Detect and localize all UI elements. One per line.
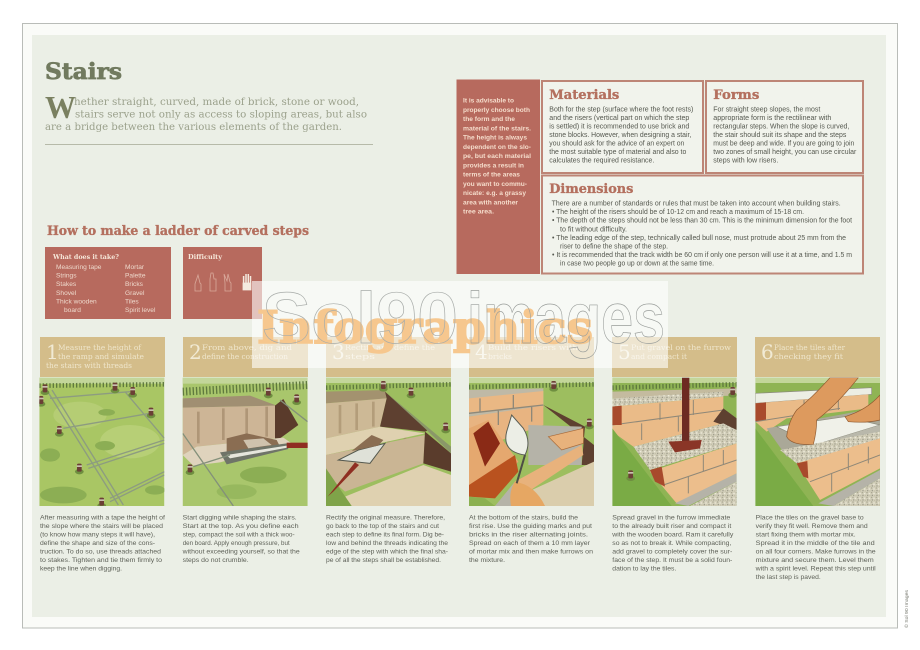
panel: side note: nicate: e.g. a grassy [463,190,526,197]
step 4 text: the mixture. [469,557,505,564]
step 4 header: 4 [475,340,488,364]
panel: difficulty [183,247,262,319]
step 2 header [183,337,308,377]
panel: materials: calculates the required resistance. [549,158,654,164]
icon: difficulty hands [195,273,251,291]
panel: side note: material of the stairs. [463,125,531,132]
step 5 [611,337,737,572]
panel: side note: dependent on the slo- [463,144,531,151]
step 5 header: 5 [618,340,631,364]
step 2 text: den board. Apply enough pressure, but [183,540,290,547]
panel: dimensions: • The leading edge of the step, technically called bull nose, must protrude about 25 mm from the [552,235,846,242]
step 4 header: Build the risers with [488,343,578,352]
step 5 text [611,514,734,572]
step 2 header: From above, dig and [202,343,292,352]
panel: forms: For straight steep slopes, the most [713,106,820,114]
panel: side note [456,80,540,274]
step 3 text: Rectify the original measure. Therefore, [326,514,445,522]
step 6 illustration: placing tiles [755,378,880,506]
step 2 text: Start digging while shaping the stairs. [183,514,297,522]
step 6 text: the last step is paved. [756,574,821,581]
panel: side note: properly choose both [463,107,530,114]
panel: what does it take: Thick wooden [56,298,97,305]
panel: what does it take: Spirit level [125,307,156,314]
panel: side note: pe, but each material [463,153,531,160]
step 3 text: pe of all the steps shall be established. [326,557,441,564]
panel: materials [542,81,703,173]
step 1 header [40,337,165,377]
panel: materials: stone blocks. However, when designing a stair, [549,132,691,139]
step 5 text: to the already built riser and compact it [612,523,731,530]
step 6 text: Place the tiles on the gravel base to [756,514,864,522]
panel: side note: you want to commu- [463,181,527,188]
step 2 header: define the construction [202,352,288,361]
step 4 text: bricks in the riser alternating joints. [469,532,588,538]
step 2 text: steps do not crumble. [183,557,249,564]
heading: how to make: How to make a ladder of carved steps [47,224,309,239]
step 5 text: Spread gravel in the furrow immediate [612,514,731,522]
step 5 text: face of the step. It must be a solid foun- [612,557,732,564]
step 1 text: After measuring with a tape the height of [40,514,165,522]
step 3 illustration: trowel on carved steps [326,378,451,506]
step 3 header [326,337,451,377]
panel: what does it take: board [64,307,81,314]
step 6 text: with a spirit level. Repeat this step until [755,566,876,572]
panel: what does it take: Gravel [125,290,145,297]
panel: materials: Materials [549,88,619,103]
step 4 text: Spread on each of them a 10 mm layer [469,540,591,547]
panel: what does it take: Mortar [125,264,145,271]
panel: materials: and the risers (vertical part on which the step [549,115,689,122]
step 3 text: edge of the step with which the final sha- [326,548,448,556]
step 2 text [182,514,300,564]
panel: what does it take: Stakes [56,281,77,288]
step 5 illustration: ramming gravel [612,378,737,506]
step 1 text: keep the line when digging. [40,566,122,572]
step 6 header [755,337,880,377]
step 4 illustration: laying bricks [469,378,594,506]
step 4 header: bricks [488,352,512,361]
step 5 text: so as not to break it. While compacting, [612,540,731,547]
step 1 text [40,514,165,572]
step 5 text: dation to lay the tiles. [612,566,676,572]
step 2 text: step, compact the soil with a thick woo- [183,532,295,538]
watermark: Infographics [257,301,593,354]
step 2 text: Start at the top. As you define each [183,523,299,530]
step 2 header: 2 [189,340,202,364]
step 4 text: At the bottom of the stairs, build the [469,514,578,522]
panel: side note: It is advisable to [463,98,514,105]
panel: side note: tree area. [463,209,494,216]
step 6 [755,337,880,581]
panel: what does it take: Tiles [125,298,139,305]
step 2 text: without exceeding yourself, so that the [182,548,300,556]
step 3 text [326,514,448,564]
step 4 text: first rise. Use the guiding marks and put [469,523,592,530]
step 5 header: and compact it [631,352,687,361]
step 4 text [469,514,593,564]
step 3 text: go back to the top of the stairs and cut [326,523,439,530]
step 6 text: on all four corners. Make furrows in the [756,548,876,556]
step 3 header: Rectify and define the [345,343,435,352]
step 4 [469,337,594,564]
step 6 text [755,514,876,581]
step 3 header: 3 [332,340,345,364]
step 1 header: the stairs with threads [46,361,132,370]
step 6 text: verify they fit well. Remove them and [756,523,868,530]
intro text: W [45,89,76,125]
panel: what does it take: What does it take? [52,254,120,261]
step 5 header [612,337,737,377]
step 6 header: checking they fit [774,352,843,361]
step 3 text: low and behind the threads indicating the [326,540,448,547]
panel: forms: steps with low risers. [713,158,778,164]
title: Stairs [45,59,122,85]
panel: side note: The height is always [463,135,527,142]
panel: materials: the most suitable type of material and also to [549,149,686,156]
step 5 text: add gravel to completely cover the sur- [612,548,732,556]
step 3 [326,337,451,564]
step 5 header: Put gravel on the furrow [631,343,732,352]
step 1 text: the slope where the stairs will be placed [40,523,163,530]
step 1 [37,337,165,572]
step 1 text: truction. To do so, use threads attached [40,548,161,556]
panel: dimensions: • The height of the risers should be of 10-12 cm and reach a maximum of 15-18 cm. [552,209,804,216]
step 6 header: 6 [761,340,774,364]
step 6 text: start fixing them with mortar mix. [756,532,856,538]
step 3 header: steps [345,352,375,361]
credit: © Sol 90 Images [903,589,910,628]
panel: what does it take: Strings [56,273,77,280]
panel: forms: Forms [713,88,759,103]
panel: dimensions: There are a number of standards or rules that must be taken into account when building stairs. [552,201,841,208]
step 5 text: with the wooden board. Ram it carefully [611,532,734,538]
step 6 text: Spread it in the middle of the tile and [756,540,875,547]
panel: materials: is settled) it is recommended to use brick and [549,124,689,130]
panel: side note: area with another [463,199,518,206]
panel: side note: provides a result in [463,162,524,169]
step 1 header: 1 [46,340,59,364]
step 3 text: each step to define its final form. Dig be- [326,532,444,538]
step 2 [182,337,310,564]
panel: dimensions: Dimensions [549,182,633,197]
panel: what does it take: Shovel [56,290,77,297]
panel: dimensions: • The depth of the steps should not be less than 30 cm. This is the minimum dimension for the foot [552,218,852,225]
panel: what does it take: Bricks [125,281,144,288]
step 1 illustration: threads on grass [37,378,165,508]
step 6 text: mixture and secure them. Level them [756,557,874,564]
step 1 header: Measure the height of [58,343,142,352]
panel: dimensions: riser to define the shape of the step. [560,243,668,250]
step 4 header [469,337,594,377]
panel: dimensions: • It is recommended that the track width be 60 cm if only one person will use it at a time, and 1.5 m [552,252,852,259]
step 4 text: of mortar mix and then make furrows on [469,548,593,556]
intro text: stairs serve not only as access to sloping areas, but also [75,110,367,120]
panel: forms: the stair should suit its shape and the steps [713,132,847,139]
panel: side note: terms of the areas [463,172,520,179]
panel: side note: the form and the [463,116,515,123]
panel: forms: two zones of small height, you can use circular [713,149,857,156]
intro text: hether straight, curved, made of brick, stone or wood, [74,97,359,108]
panel: dimensions: to fit without difficulty. [560,226,627,233]
panel: dimensions [542,176,863,274]
step 2 illustration: digging [183,378,310,506]
panel: materials: you should ask for the advice of an expert on [549,140,684,148]
panel: forms: appropriate form is the rectilinear with [713,115,831,122]
watermark: Sol90 [262,279,458,359]
panel: difficulty: Difficulty [188,254,223,261]
panel: forms [706,81,863,173]
panel: what does it take [45,247,171,319]
panel: forms: must be deep and wide. If you are going to join [713,140,854,148]
intro text: are a bridge between the various elements of the garden. [45,122,342,133]
watermark: images [467,279,665,359]
watermark [252,279,668,368]
panel: materials: Both for the step (surface where the foot rests) [549,106,693,114]
step 6 header: Place the tiles after [774,343,845,352]
panel: forms: rectangular steps. When the slope is curved, [713,124,849,130]
panel: what does it take: Measuring tape [56,264,102,271]
panel: what does it take: Palette [125,273,146,280]
panel: dimensions: in case two people go up or down at the same time. [560,260,714,268]
step 1 text: to stakes. Tighten and tie them firmly to [40,557,162,564]
step 1 header: the ramp and simulate [58,352,144,361]
step 1 text: (to know how many steps it will have), [40,532,155,538]
step 1 text: define the shape and size of the cons- [40,540,155,547]
intro text [45,89,367,133]
